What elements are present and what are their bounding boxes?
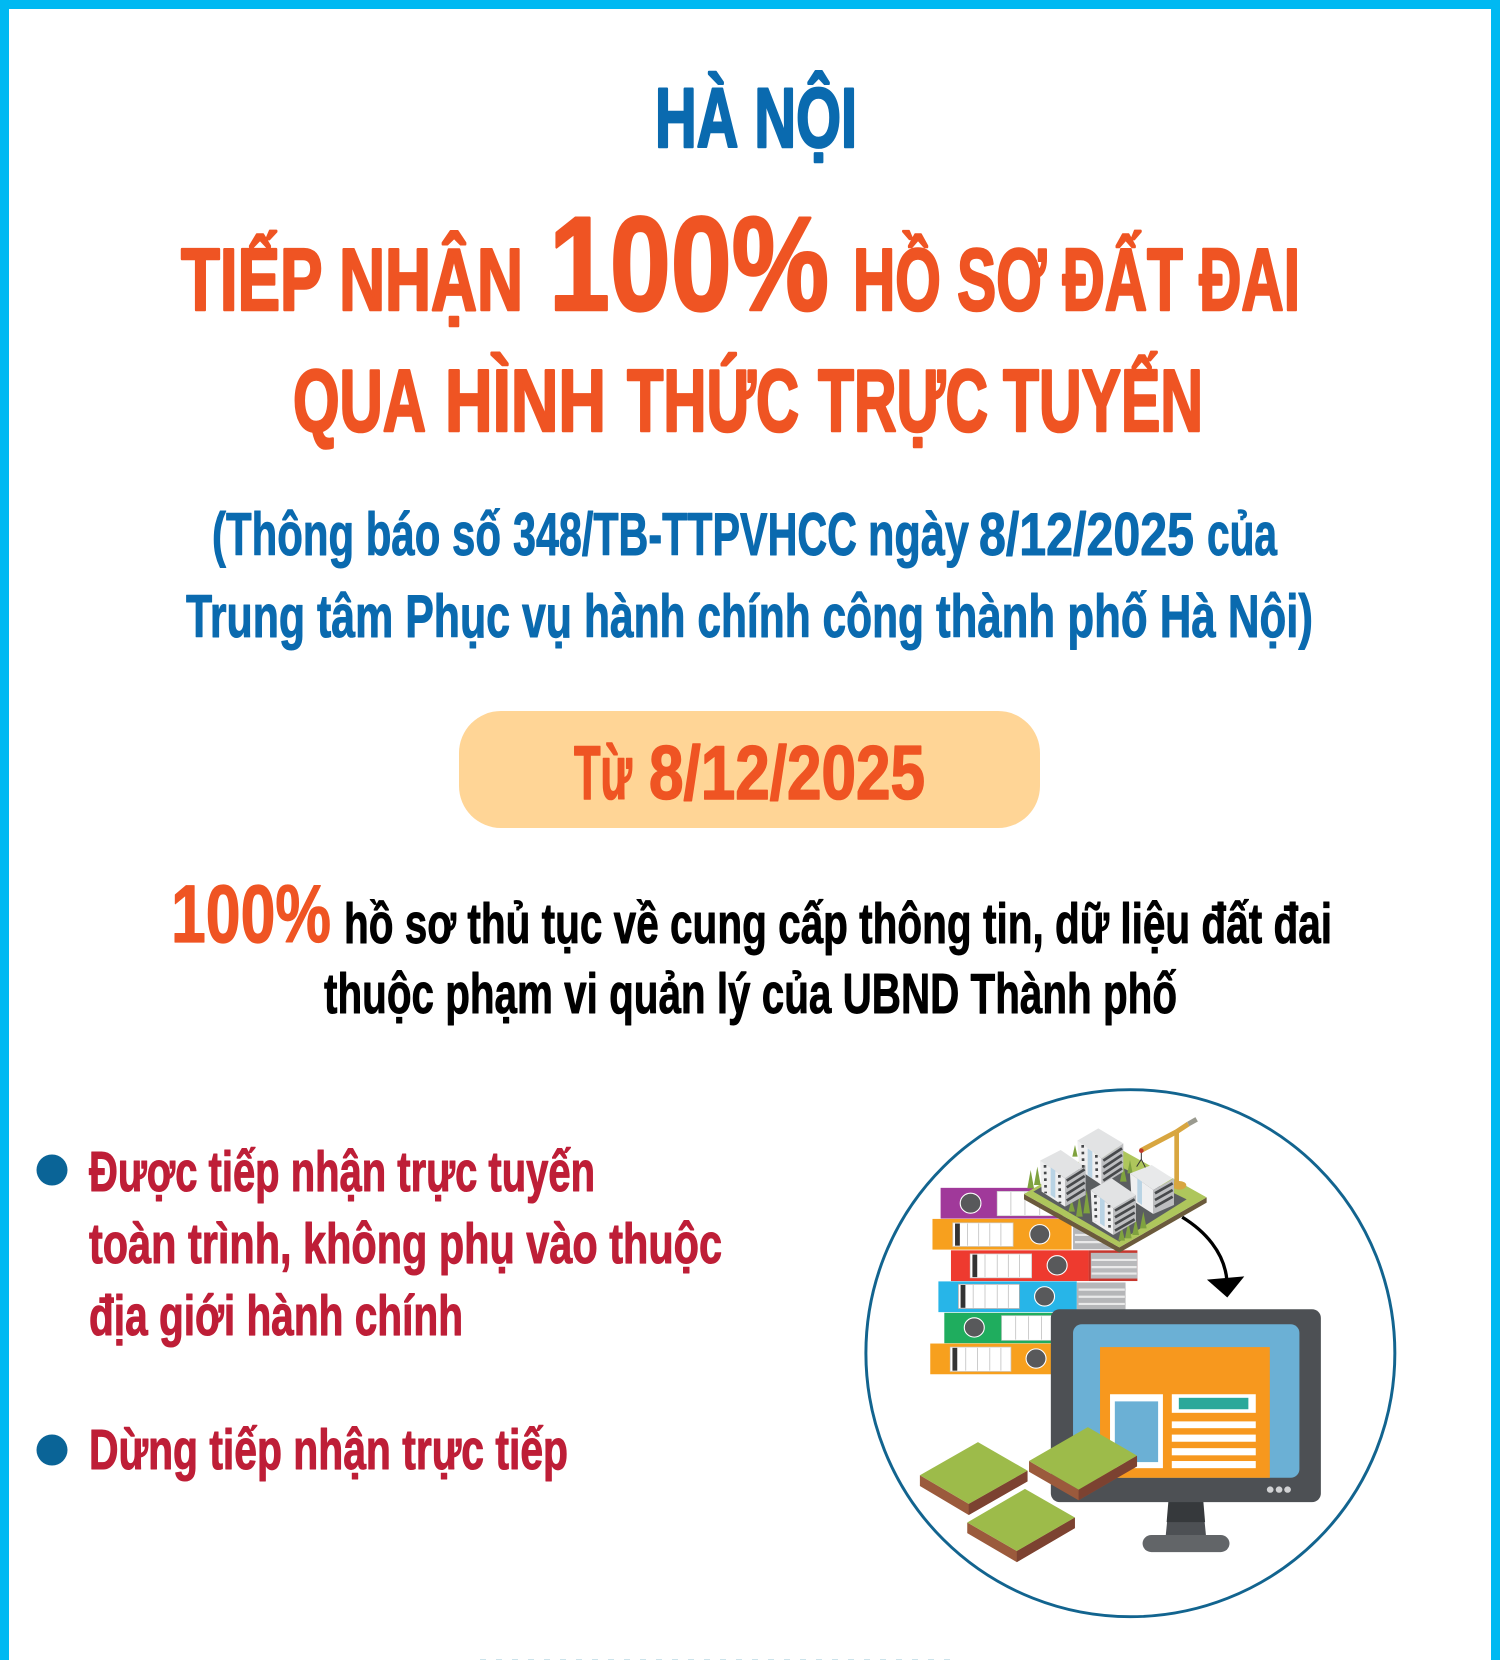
bullet 1 [36, 1140, 722, 1348]
title line 2: TRỰC [818, 351, 988, 450]
title line 1: TIẾP NHẬN [181, 230, 523, 329]
crane [1137, 1119, 1197, 1190]
arrow [1182, 1217, 1244, 1297]
icon: buildings on a land parcel [1024, 1119, 1207, 1253]
source note: ngày [868, 501, 969, 568]
bullet 1: địa giới hành chính [89, 1284, 463, 1348]
source note: Trung tâm Phục vụ [186, 583, 572, 650]
title line 1: 100% [549, 190, 829, 339]
bullet 1: Được tiếp nhận trực tuyến [89, 1140, 595, 1204]
source note: (Thông báo số [212, 501, 501, 568]
date pill: 8/12/2025 [649, 731, 925, 816]
source note [186, 501, 1313, 650]
bullet 1: toàn trình, không phụ vào thuộc [89, 1212, 722, 1276]
date pill [459, 711, 1040, 828]
title line 2: HÌNH [445, 351, 606, 450]
title line 1 [181, 190, 1300, 339]
bullet 2: Dừng tiếp nhận trực tiếp [89, 1418, 568, 1482]
icon: stack of binders [930, 1188, 1137, 1374]
date pill: Từ [574, 731, 633, 816]
title line 2: QUA [293, 351, 426, 450]
source note: 348/TB-TTPVHCC [513, 501, 857, 568]
main statement: 100% [171, 869, 331, 960]
main statement [171, 869, 1332, 1026]
title line 2 [293, 351, 1203, 450]
buildings [1040, 1128, 1174, 1235]
main statement: thuộc phạm vi quản lý của UBND Thành phố [324, 962, 1177, 1026]
title line 2: TUYẾN [1003, 351, 1203, 450]
heading: Hà Nội: HÀ NỘI [655, 71, 857, 165]
source note: thành phố Hà Nội) [936, 583, 1313, 650]
bullet 2 [36, 1418, 568, 1482]
icon: monitor [1051, 1309, 1321, 1552]
source note: hành chính công [584, 583, 924, 650]
source note: của [1207, 501, 1277, 568]
illustration: files, buildings and monitor [866, 1090, 1395, 1617]
title line 2: THỨC [627, 351, 799, 450]
icon: land plots [920, 1427, 1137, 1562]
circle outline [866, 1090, 1395, 1617]
source note: 8/12/2025 [979, 501, 1194, 568]
